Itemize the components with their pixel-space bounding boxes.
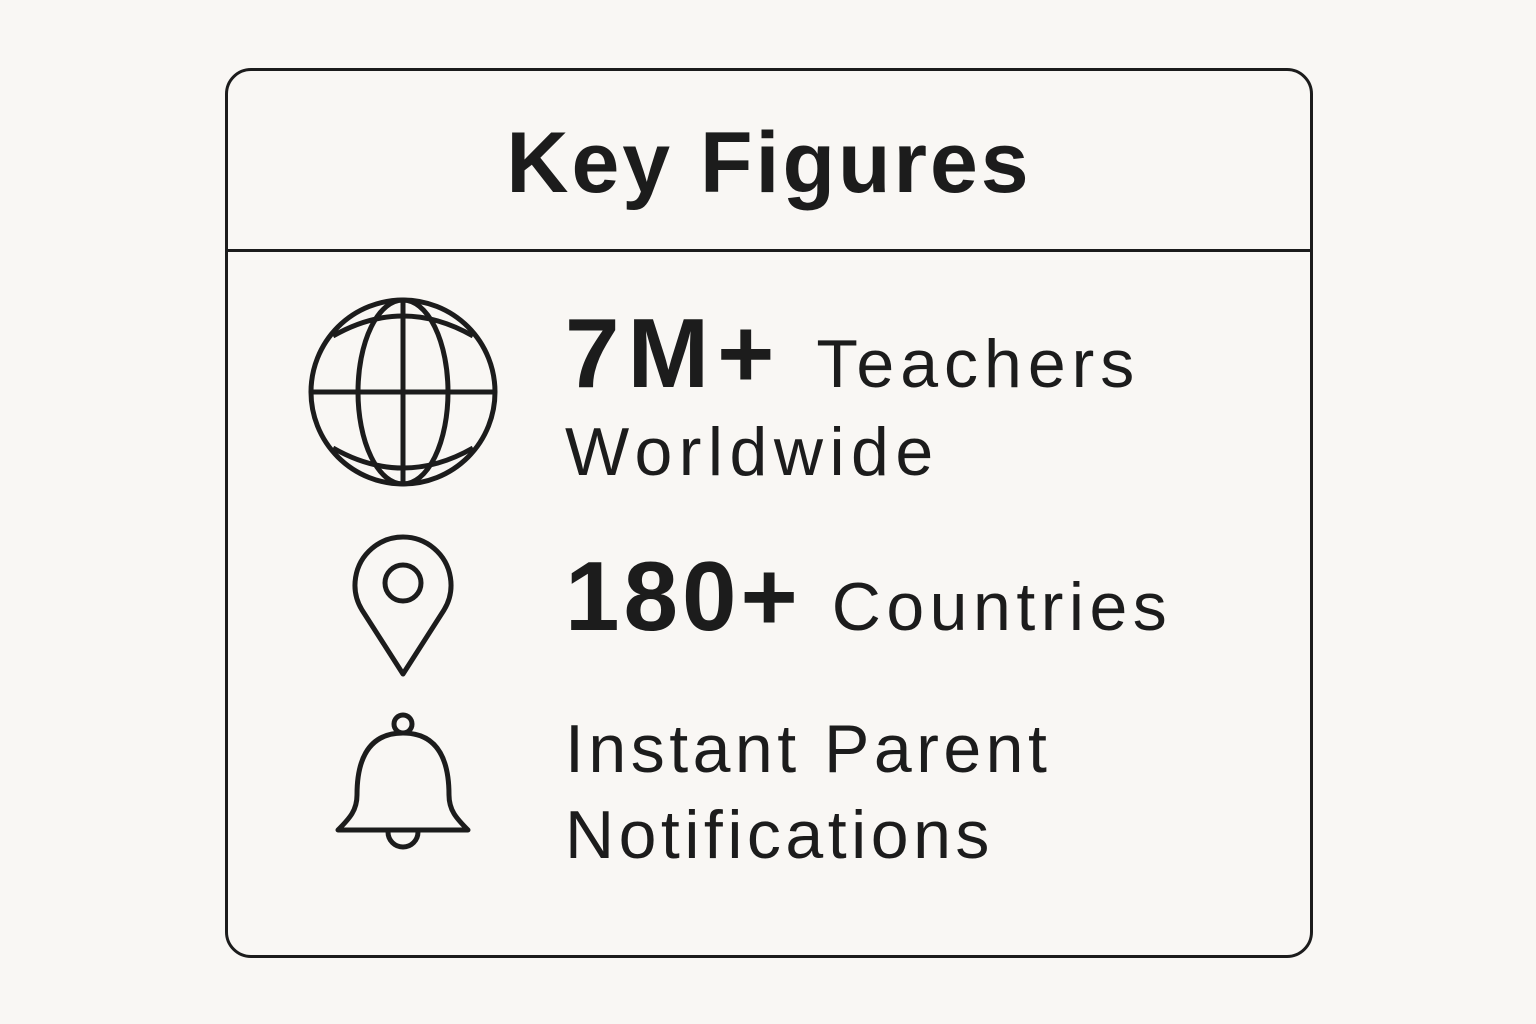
title: Key Figures	[506, 115, 1032, 211]
text: Worldwide	[565, 414, 940, 490]
icon: location pin	[352, 534, 454, 676]
icon: globe	[308, 298, 498, 486]
stat: notifications	[565, 711, 1051, 873]
stat: countries: 180+ Countries	[565, 541, 1172, 651]
icon: bell	[336, 712, 470, 850]
stat: teachers: 7M+ Teachers	[565, 298, 1140, 408]
stat: notifications: Notifications	[565, 797, 994, 873]
stat: notifications: Instant Parent	[565, 711, 1051, 787]
panel: key figures card	[225, 68, 1313, 958]
header divider	[228, 249, 1310, 252]
